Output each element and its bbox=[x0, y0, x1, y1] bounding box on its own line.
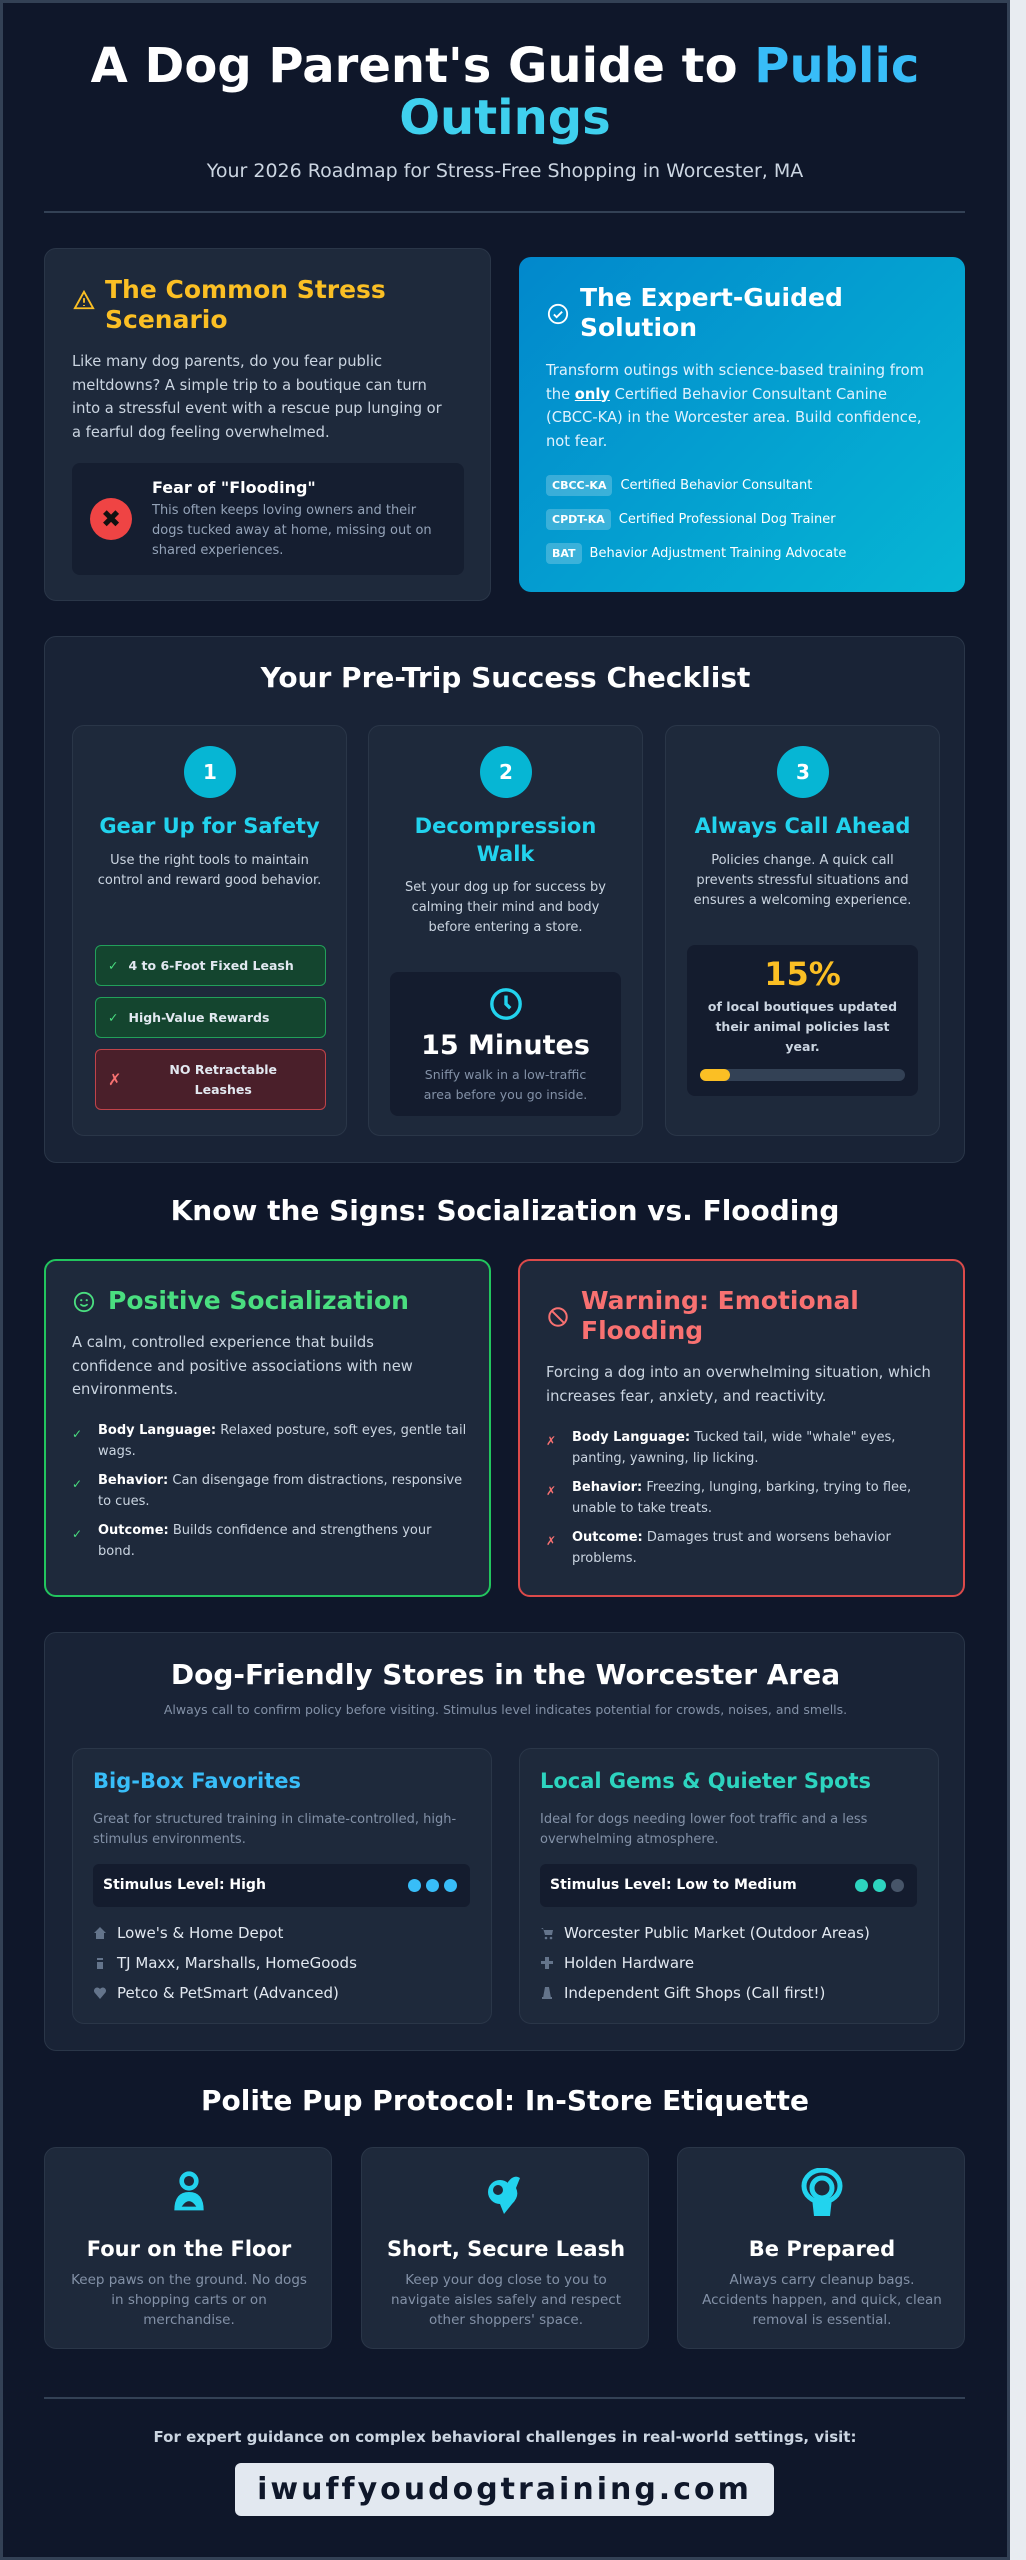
list: flooding signs: Body Language: Tucked tail, wide "whale" eyes, panting, yawning, lip licking. bbox=[572, 1430, 895, 1466]
step 2: Walk bbox=[477, 842, 534, 866]
credentials list: CBCC-KA bbox=[552, 478, 606, 492]
heading: know the signs: Know the Signs: Socialization vs. Flooding bbox=[171, 1194, 839, 1227]
icon: smile bbox=[74, 1292, 94, 1312]
icon: leash bbox=[488, 2176, 520, 2214]
pill: rewards: ✓ bbox=[108, 1010, 118, 1025]
panel: dog-friendly stores: Always call to confirm policy before visiting. Stimulus level indicates potential for crowds, noises, and smells. bbox=[164, 1702, 847, 1717]
credentials list: BAT bbox=[552, 546, 576, 560]
pill: rewards: High-Value Rewards bbox=[128, 1010, 269, 1025]
etiquette card: short leash bbox=[361, 2147, 649, 2349]
heading: solution: The Expert-Guided Solution bbox=[580, 283, 843, 342]
pill: no retractable: Leashes bbox=[195, 1082, 252, 1096]
step 2: Decompression bbox=[415, 814, 596, 838]
etiquette card: short leash: Short, Secure Leash bbox=[387, 2237, 625, 2261]
sub-panel: local gems bbox=[519, 1748, 939, 2024]
callout: 15 minutes bbox=[390, 972, 621, 1116]
step 3 bbox=[665, 725, 940, 1136]
stat: 15%: 15% bbox=[764, 955, 841, 993]
stat: 15% bbox=[687, 945, 918, 1096]
stimulus meter: high: Stimulus Level: High bbox=[103, 1877, 266, 1893]
list: positive signs: ✓ bbox=[72, 1427, 82, 1441]
pill: no retractable: NO Retractable bbox=[169, 1062, 277, 1076]
stat: 15%: of local boutiques updated their animal policies last year. bbox=[708, 999, 897, 1054]
pill: rewards bbox=[95, 997, 326, 1038]
panel: positive socialization bbox=[44, 1259, 491, 1597]
list: positive signs: Outcome: Builds confidence and strengthens your bond. bbox=[98, 1523, 431, 1558]
text: solution description: Transform outings with science-based training from the only Certified Behavior Consultant Canine (CBCC‑KA) in the Worcester area. Build confidence, not fear. bbox=[546, 362, 924, 450]
credentials list: Certified Behavior Consultant bbox=[620, 478, 812, 492]
icon: check circle bbox=[548, 304, 568, 324]
pill: fixed leash: ✓ bbox=[108, 958, 118, 973]
icon: bag bbox=[802, 2168, 842, 2216]
panel: common stress scenario bbox=[44, 248, 491, 601]
icon: person bbox=[174, 2171, 204, 2210]
list: big-box stores: Petco & PetSmart (Advanced) bbox=[117, 1984, 339, 2002]
icon: red x: ✖ bbox=[101, 505, 121, 533]
panel: dog-friendly stores bbox=[44, 1632, 965, 2051]
list: big-box stores: TJ Maxx, Marshalls, HomeGoods bbox=[117, 1954, 357, 1972]
step 3: 3 bbox=[796, 760, 810, 784]
credentials list: CPDT-KA bbox=[552, 512, 605, 526]
step 2: 2 bbox=[499, 760, 513, 784]
sub-panel: local gems: Ideal for dogs needing lower foot traffic and a less overwhelming atmosphere. bbox=[540, 1812, 867, 1847]
sub-panel: big-box bbox=[72, 1748, 492, 2024]
list: local stores: Independent Gift Shops (Call first!) bbox=[564, 1984, 825, 2002]
list: flooding signs bbox=[546, 1430, 911, 1566]
list: positive signs: Body Language: Relaxed posture, soft eyes, gentle tail wags. bbox=[98, 1423, 466, 1458]
stimulus meter: low-medium bbox=[540, 1864, 917, 1907]
callout: fear of flooding: This often keeps loving owners and their dogs tucked away at home, missing out on shared experiences. bbox=[152, 503, 432, 558]
list: local stores bbox=[541, 1924, 870, 2002]
credentials list: Certified Professional Dog Trainer bbox=[619, 512, 836, 526]
footer url: iwuffyoudogtraining.com bbox=[257, 2472, 752, 2507]
panel: positive socialization: A calm, controlled experience that builds confidence and positive associations with new environments. bbox=[72, 1334, 413, 1398]
icon: prohibited bbox=[548, 1307, 568, 1327]
panel: dog-friendly stores: Dog-Friendly Stores in the Worcester Area bbox=[171, 1658, 840, 1691]
icon: clock bbox=[490, 988, 522, 1020]
panel: expert-guided solution bbox=[519, 257, 965, 592]
pill: no retractable bbox=[95, 1049, 326, 1110]
list: local stores: Holden Hardware bbox=[564, 1954, 694, 1972]
callout: fear of flooding bbox=[72, 463, 464, 575]
heading: checklist: Your Pre-Trip Success Checklist bbox=[261, 661, 750, 694]
list: big-box stores bbox=[94, 1924, 357, 2002]
list: big-box stores: Lowe's & Home Depot bbox=[117, 1924, 283, 1942]
etiquette card: be prepared: Be Prepared bbox=[749, 2237, 895, 2261]
stimulus meter: low-medium: Stimulus Level: Low to Medium bbox=[550, 1877, 797, 1893]
list: flooding signs: Outcome: Damages trust and worsens behavior problems. bbox=[572, 1530, 891, 1566]
list: flooding signs: ✗ bbox=[546, 1434, 556, 1448]
step 1: Use the right tools to maintain control and reward good behavior. bbox=[98, 853, 321, 888]
panel: emotional flooding bbox=[518, 1259, 965, 1597]
sub-panel: local gems: Local Gems & Quieter Spots bbox=[540, 1769, 871, 1793]
list: positive signs: Behavior: Can disengage from distractions, responsive to cues. bbox=[98, 1473, 462, 1508]
step 1: 1 bbox=[203, 760, 217, 784]
etiquette card: short leash: Keep your dog close to you to navigate aisles safely and respect other shoppers' space. bbox=[391, 2272, 621, 2328]
etiquette card: be prepared bbox=[677, 2147, 965, 2349]
credentials list: Behavior Adjustment Training Advocate bbox=[590, 546, 846, 560]
progress bar bbox=[700, 1069, 905, 1081]
etiquette card: four on the floor bbox=[44, 2147, 332, 2349]
step 1 bbox=[72, 725, 347, 1136]
credentials list bbox=[546, 475, 846, 564]
heading: stress: The Common Stress Scenario bbox=[105, 275, 386, 334]
footer text: For expert guidance on complex behavioral challenges in real-world settings, visit: bbox=[154, 2428, 856, 2446]
sub-panel: big-box: Great for structured training in climate-controlled, high-stimulus environments. bbox=[93, 1812, 456, 1847]
title: A Dog Parent's Guide to Public Outings bbox=[91, 38, 919, 146]
subtitle: Your 2026 Roadmap for Stress-Free Shopping in Worcester, MA bbox=[207, 160, 803, 182]
sub-panel: big-box: Big-Box Favorites bbox=[93, 1769, 301, 1793]
panel: positive socialization: Positive Socialization bbox=[108, 1286, 409, 1315]
footer url bbox=[235, 2463, 774, 2516]
pill: no retractable: ✗ bbox=[108, 1070, 121, 1089]
step 2: Set your dog up for success by calming their mind and body before entering a store. bbox=[405, 880, 606, 935]
list: positive signs: ✓ bbox=[72, 1527, 82, 1541]
step 2 bbox=[368, 725, 643, 1136]
step 1: Gear Up for Safety bbox=[99, 814, 320, 838]
icon: red x bbox=[90, 498, 132, 540]
callout: 15 minutes: Sniffy walk in a low-traffic area before you go inside. bbox=[424, 1067, 587, 1102]
etiquette card: four on the floor: Four on the Floor bbox=[87, 2237, 291, 2261]
list: positive signs bbox=[72, 1423, 466, 1558]
panel: pre-trip checklist bbox=[44, 636, 965, 1163]
list: local stores: Worcester Public Market (Outdoor Areas) bbox=[564, 1924, 870, 1942]
list: positive signs: ✓ bbox=[72, 1477, 82, 1491]
callout: fear of flooding: Fear of "Flooding" bbox=[152, 478, 316, 497]
pill: fixed leash: 4 to 6-Foot Fixed Leash bbox=[128, 958, 294, 973]
list: flooding signs: ✗ bbox=[546, 1484, 556, 1498]
list: flooding signs: Behavior: Freezing, lunging, barking, trying to flee, unable to take treats. bbox=[572, 1480, 911, 1516]
etiquette card: be prepared: Always carry cleanup bags. Accidents happen, and quick, clean removal is essential. bbox=[702, 2272, 942, 2328]
list: flooding signs: ✗ bbox=[546, 1534, 556, 1548]
icon: warning bbox=[73, 290, 95, 310]
etiquette card: four on the floor: Keep paws on the ground. No dogs in shopping carts or on merchandise. bbox=[71, 2272, 307, 2328]
panel: emotional flooding: Forcing a dog into an overwhelming situation, which increases fear, anxiety, and reactivity. bbox=[546, 1364, 931, 1404]
heading: etiquette: Polite Pup Protocol: In-Store Etiquette bbox=[201, 2084, 809, 2117]
text: stress description: Like many dog parents, do you fear public meltdowns? A simple trip to a boutique can turn into a stressful event with a rescue pup lunging or a fearful dog feeling overwhelmed. bbox=[72, 353, 442, 440]
callout: 15 minutes: 15 Minutes bbox=[421, 1030, 590, 1061]
step 3: Policies change. A quick call prevents stressful situations and ensures a welcoming experience. bbox=[694, 853, 911, 908]
stimulus meter: high bbox=[93, 1864, 470, 1907]
pill: fixed leash bbox=[95, 945, 326, 986]
step 3: Always Call Ahead bbox=[695, 814, 910, 838]
panel: emotional flooding: Warning: Emotional Flooding bbox=[581, 1286, 859, 1345]
